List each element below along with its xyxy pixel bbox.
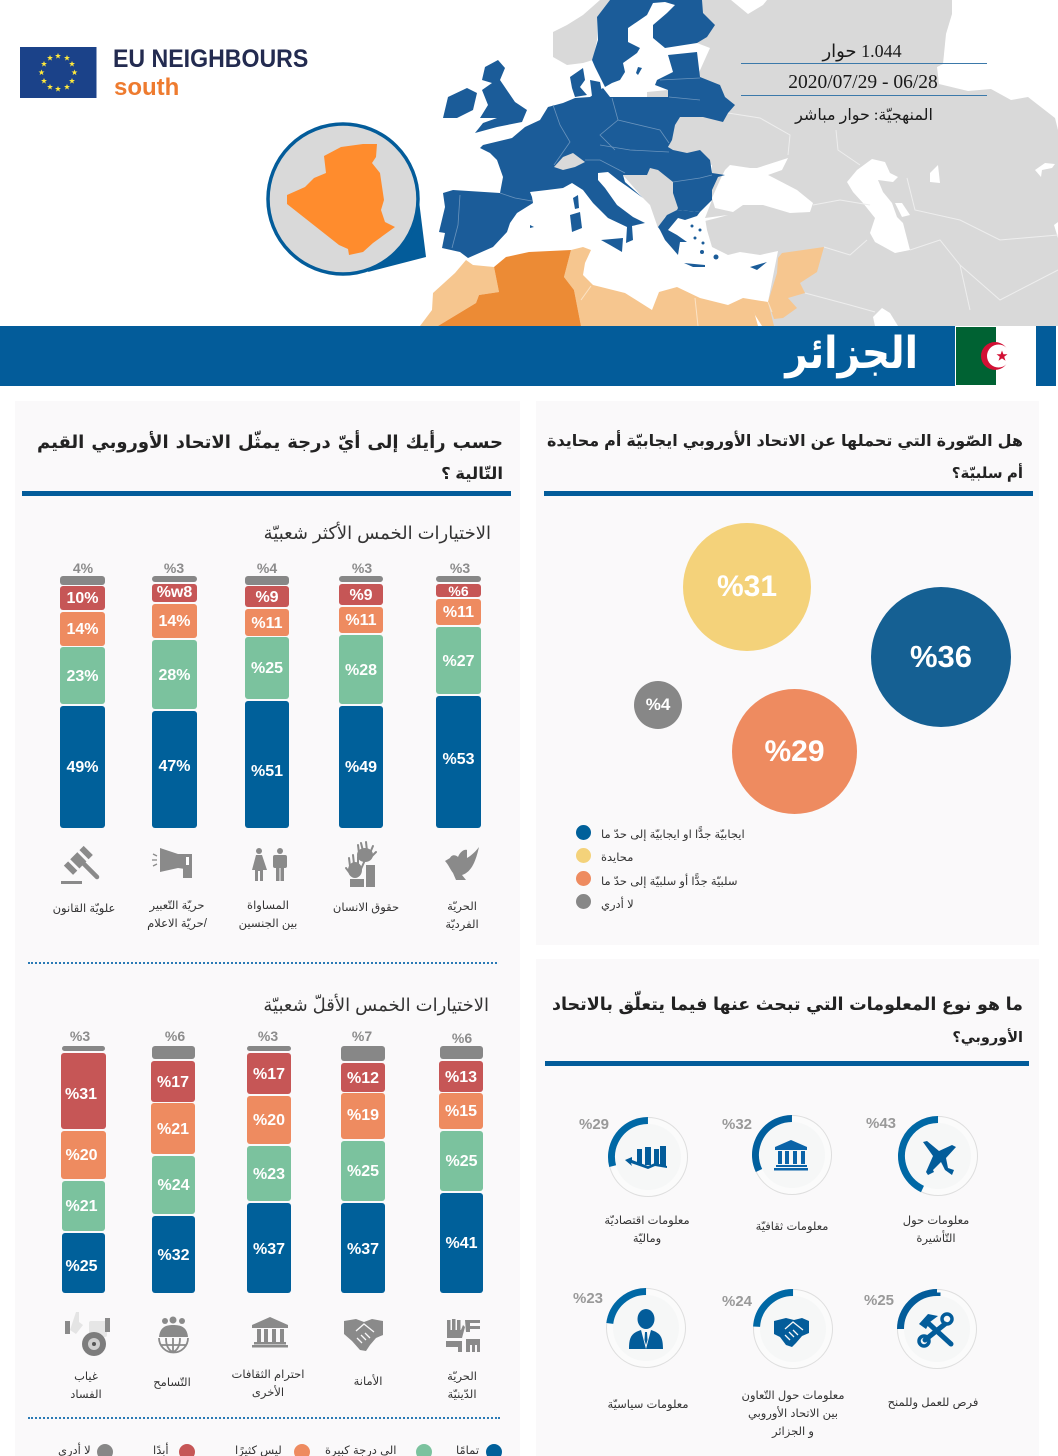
panel: values <box>15 401 520 1456</box>
logo: EU flag <box>20 47 96 98</box>
subheading: five most popular: الاختيارات الخمس الأكثر شعبيّة <box>264 523 491 543</box>
text: 23% <box>66 668 99 684</box>
text: 28% <box>158 666 191 684</box>
text: 14% <box>66 621 99 638</box>
label: الحريّة <box>447 901 477 913</box>
text: %w8 <box>157 584 192 601</box>
label: معلومات اقتصاديّة <box>604 1215 690 1227</box>
text: %17 <box>157 1074 189 1090</box>
survey facts: 1.044 حوار <box>822 41 902 61</box>
text: %13 <box>445 1068 477 1086</box>
text: %24 <box>722 1293 752 1310</box>
label: حقوق الانسان <box>333 902 399 914</box>
text: %20 <box>253 1112 285 1129</box>
text: %9 <box>255 588 279 606</box>
labels: most popular values <box>53 900 479 931</box>
text: %25 <box>445 1153 478 1170</box>
land: EU blue <box>439 0 767 270</box>
text: %7 <box>352 1028 372 1044</box>
panel: image of EU <box>536 401 1039 945</box>
label: و الجزائر <box>772 1426 814 1438</box>
label <box>232 1369 304 1399</box>
heading: information question: الأوروبي؟ <box>952 1030 1023 1046</box>
label: الحريّة <box>447 1371 477 1383</box>
donut values <box>573 1115 896 1310</box>
icon: handshake <box>774 1318 809 1347</box>
seas <box>705 158 1058 326</box>
text: 10% <box>66 590 99 607</box>
text: %24 <box>157 1177 190 1194</box>
bubble chart: image of EU <box>634 523 1011 814</box>
label <box>903 1215 969 1245</box>
label: التّسامح <box>153 1377 191 1389</box>
icon: gavel <box>61 846 97 884</box>
bar: individual freedom <box>436 560 481 828</box>
heading: information question: ما هو نوع المعلومات التي تبحث عنها فيما يتعلّق بالاتحاد <box>552 994 1023 1014</box>
logo wordmark: EU NEIGHBOURS <box>113 45 308 73</box>
bubble: don't know <box>634 681 682 729</box>
text: %29 <box>579 1116 609 1133</box>
text: %11 <box>251 614 283 632</box>
text: %32 <box>157 1246 190 1264</box>
text: %25 <box>864 1292 894 1309</box>
label: الفرديّة <box>445 919 479 931</box>
Maghreb and Mashreq neighbours <box>420 247 824 326</box>
text: %37 <box>347 1241 379 1258</box>
text: %25 <box>65 1258 98 1275</box>
bar: honesty <box>341 1028 385 1293</box>
text: %17 <box>253 1066 285 1082</box>
label: فرص للعمل وللمنح <box>888 1397 978 1409</box>
text: %6 <box>452 1030 472 1046</box>
donut: political 23% <box>605 1287 687 1369</box>
labels: least popular values <box>70 1369 477 1401</box>
bar: human rights <box>339 560 383 828</box>
text: %53 <box>442 751 475 768</box>
text: %19 <box>347 1107 379 1124</box>
text: %11 <box>345 612 377 629</box>
text: %23 <box>253 1166 285 1182</box>
bubble: neutral <box>683 523 811 651</box>
label: وماليّة <box>633 1233 661 1245</box>
icon: dove <box>445 847 479 880</box>
label: معلومات حول <box>903 1215 969 1227</box>
bubble: negative <box>732 689 857 814</box>
icon: handshake <box>344 1319 383 1351</box>
icon: hammer and wrench <box>919 1314 952 1346</box>
logo wordmark: south <box>114 74 179 101</box>
text: %25 <box>251 660 283 677</box>
icon: plane <box>923 1141 956 1175</box>
text: %25 <box>347 1163 379 1180</box>
bubble: positive: %36 <box>910 639 972 674</box>
bar chart: most popular values <box>60 560 481 828</box>
logo wordmark <box>113 45 308 101</box>
icon: corruption lock <box>65 1312 110 1356</box>
text: %15 <box>445 1103 477 1120</box>
text: %3 <box>70 1028 90 1044</box>
panel: information types <box>536 959 1039 1456</box>
label: المساواة <box>247 900 289 912</box>
text: %23 <box>573 1290 603 1307</box>
label: معلومات حول التّعاون <box>742 1390 844 1402</box>
icon: chart <box>625 1146 667 1169</box>
land: non-EU grey <box>553 0 1058 326</box>
label: حريّة التّعبير <box>149 900 205 912</box>
text: ايجابيّة جدًّا او ايجابيّة إلى حدّ ما <box>601 829 745 841</box>
text: %4 <box>257 560 277 576</box>
label <box>447 1371 477 1401</box>
text: %28 <box>345 662 377 678</box>
Switzerland <box>554 153 585 170</box>
donut: economic 29% <box>604 1113 692 1201</box>
text: %27 <box>442 652 475 670</box>
survey facts: المنهجيّة: حوار مباشر <box>795 107 933 124</box>
label: بين الاتحاد الأوروبي <box>748 1408 838 1420</box>
text: %20 <box>65 1147 98 1164</box>
text: محايدة <box>601 852 633 864</box>
bar: respect for other cultures <box>247 1028 291 1293</box>
icon: clasped hands <box>446 1319 480 1352</box>
label <box>239 900 297 930</box>
country name: الجزائر <box>785 329 918 378</box>
label: غياب <box>74 1371 98 1383</box>
label: علويّة القانون <box>53 903 115 915</box>
text: %43 <box>866 1115 896 1132</box>
text: 49% <box>66 759 99 776</box>
label <box>147 900 207 930</box>
subheading: five least popular: الاختيارات الخمس الأقلّ شعبيّة <box>263 995 489 1015</box>
donut: cultural 32% <box>743 1106 841 1204</box>
donut: cooperation 24% <box>754 1290 832 1368</box>
text: %11 <box>443 604 474 621</box>
text: %3 <box>258 1028 278 1044</box>
bar: gender equality <box>245 560 289 828</box>
label: الدّينيّة <box>447 1389 477 1401</box>
text: %51 <box>251 762 283 780</box>
text: %9 <box>349 586 373 604</box>
text: %31 <box>65 1086 97 1102</box>
icon: man and woman <box>252 848 287 881</box>
label: التّأشيرة <box>916 1233 956 1245</box>
survey facts: 2020/07/29 - 06/28 <box>788 72 938 93</box>
text: %3 <box>352 560 372 576</box>
text: %32 <box>722 1116 752 1133</box>
text: 47% <box>158 758 191 775</box>
text: %6 <box>165 1028 185 1044</box>
icon: raised hands <box>346 842 376 887</box>
text: %37 <box>253 1241 285 1258</box>
label: الأخرى <box>252 1387 284 1399</box>
bubble: negative: %29 <box>764 734 825 768</box>
donut labels <box>604 1215 978 1438</box>
bar: freedom of expression <box>152 560 197 828</box>
text: 14% <box>158 613 191 630</box>
inset: Algeria magnified <box>268 124 426 274</box>
bar chart: least popular values <box>61 1028 483 1293</box>
bar: rule of law <box>60 560 105 828</box>
icon: temple <box>774 1140 808 1170</box>
heading: values question: حسب رأيك إلى أيّ درجة يمثّل الاتحاد الأوروبي القيم <box>37 432 503 452</box>
legend: image of EU <box>576 825 745 911</box>
bubble: neutral: %31 <box>717 570 777 603</box>
label: معلومات ثقافيّة <box>756 1221 828 1233</box>
text: %12 <box>347 1070 379 1086</box>
Algeria on map <box>438 250 581 326</box>
text: %3 <box>450 560 470 576</box>
bar: tolerance <box>151 1028 195 1293</box>
label <box>445 901 479 931</box>
label <box>604 1215 690 1245</box>
donut: visa 43% <box>889 1107 987 1205</box>
text: %3 <box>164 560 184 576</box>
icon: globe with people <box>159 1316 188 1352</box>
country banner <box>0 326 1056 386</box>
donut: jobs and grants 25% <box>898 1290 976 1368</box>
label: الفساد <box>70 1389 102 1401</box>
flag of Algeria <box>955 326 1036 386</box>
text: %21 <box>65 1198 98 1215</box>
icon: megaphone <box>152 848 192 878</box>
label: احترام الثقافات <box>232 1369 304 1381</box>
label <box>742 1390 844 1438</box>
heading: values question: التّالية ؟ <box>441 465 503 483</box>
label: معلومات سياسيّة <box>607 1399 689 1411</box>
icon: businessman <box>629 1309 663 1349</box>
label <box>70 1371 102 1401</box>
text: 4% <box>73 560 93 576</box>
label: /حريّة الاعلام <box>147 918 207 930</box>
bar: religious freedom <box>439 1030 483 1293</box>
text: سلبيّة جدًّا أو سلبيّة إلى حدّ ما <box>601 876 737 888</box>
europe map <box>266 0 1058 326</box>
heading: values question <box>37 430 503 483</box>
text: %49 <box>345 759 377 776</box>
bubble: don't know: %4 <box>646 695 670 714</box>
heading: image question <box>547 430 1023 482</box>
heading: image question: هل الصّورة التي تحملها عن الاتحاد الأوروبي ايجابيّة أم محايدة <box>547 433 1023 450</box>
heading: image question: أم سلبيّة؟ <box>952 465 1023 482</box>
survey facts <box>741 41 987 124</box>
text: %41 <box>445 1235 478 1252</box>
text: لا أدري <box>601 899 634 911</box>
legend: values <box>58 1442 502 1456</box>
text: %21 <box>157 1120 189 1138</box>
bubble: positive <box>871 587 1011 727</box>
heading: information question <box>552 990 1023 1046</box>
bar: absence of corruption <box>61 1028 106 1293</box>
label: بين الجنسين <box>239 918 297 930</box>
icon: temple <box>252 1317 288 1348</box>
label: الأمانة <box>354 1376 382 1388</box>
